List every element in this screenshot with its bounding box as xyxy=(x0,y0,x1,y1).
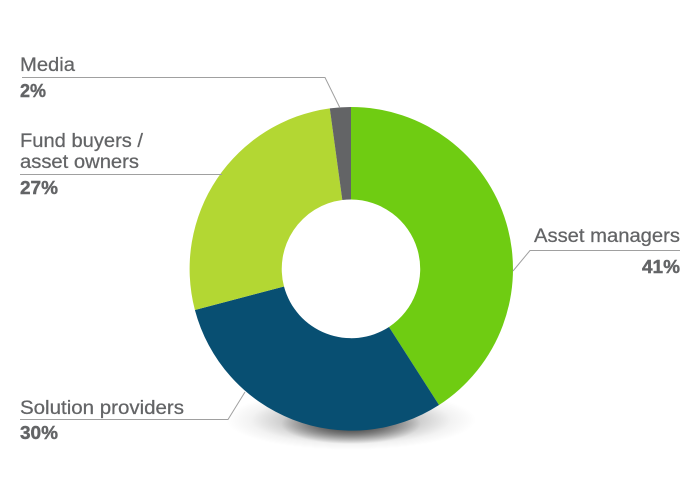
label: fund buyers / asset owners: asset owners xyxy=(20,152,139,173)
label: fund buyers / asset owners xyxy=(20,131,222,198)
label: solution providers xyxy=(20,392,245,443)
label: fund buyers / asset owners: 27% xyxy=(20,177,58,198)
donut chart xyxy=(190,107,513,431)
segment: media 2% xyxy=(330,107,351,200)
label: fund buyers / asset owners: Fund buyers / xyxy=(20,131,144,152)
label: asset managers: Asset managers xyxy=(534,226,680,247)
label: asset managers: 41% xyxy=(642,256,680,277)
drop shadow under donut xyxy=(226,390,476,450)
label: media xyxy=(20,55,340,108)
segment: solution providers 30% xyxy=(195,286,439,431)
label: solution providers: Solution providers xyxy=(20,398,184,419)
label: media: 2% xyxy=(20,80,46,101)
label: asset managers xyxy=(513,226,680,277)
label: solution providers: 30% xyxy=(20,422,58,443)
segment: fund buyers 27% xyxy=(190,108,342,310)
segment: asset managers 41% xyxy=(351,107,513,405)
label: media: Media xyxy=(20,55,75,76)
